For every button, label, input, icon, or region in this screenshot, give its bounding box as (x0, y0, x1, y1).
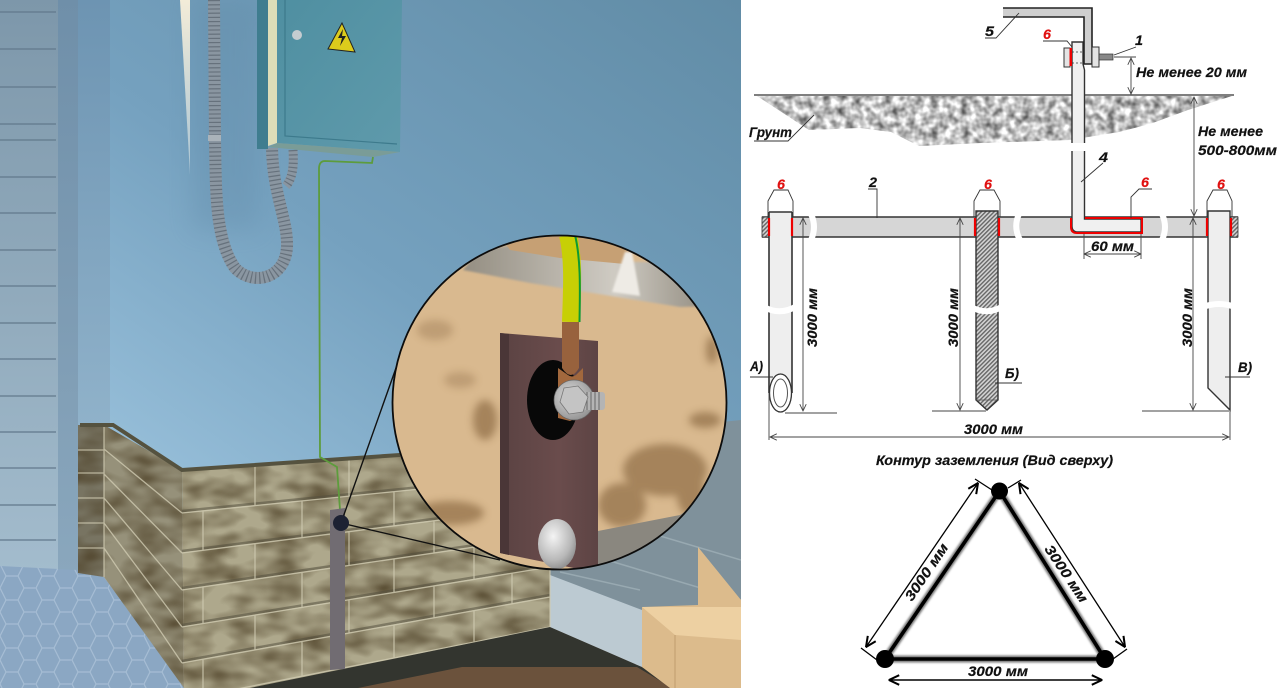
label 1 (1114, 32, 1143, 55)
label 6 at tube V (1207, 176, 1232, 217)
cabinet lock (292, 30, 302, 40)
label 6 top (1043, 26, 1072, 47)
label A (749, 358, 773, 377)
conduit: short (286, 150, 293, 186)
circle outline (392, 236, 726, 570)
dimensions: depth: 500-800мм (1198, 142, 1278, 158)
brown stains (416, 320, 721, 527)
paving (0, 566, 186, 688)
label soil: Грунт (749, 124, 792, 140)
dimension height V: 3000 мм (1179, 287, 1195, 347)
dimension 60 mm: 60 мм (1091, 238, 1135, 254)
label 6 at tube A (768, 176, 793, 217)
label 5 (985, 13, 1019, 39)
dimension left side (861, 479, 992, 660)
mortar highlight (612, 252, 640, 296)
dimension bottom side: 3000 мм (968, 663, 1029, 679)
dimensions: depth: Не менее (1198, 123, 1263, 139)
dimension overall width: 3000 мм (964, 421, 1024, 437)
rusty plate (500, 333, 598, 573)
red welds on electrodes (769, 218, 1231, 236)
conduit: clamp (208, 135, 221, 141)
label A: А) (749, 358, 763, 374)
green ground wire (319, 157, 373, 510)
panel: triangle grounding contour (861, 479, 1127, 680)
red weld on L strip (1071, 218, 1142, 233)
label V (1225, 359, 1252, 377)
heading: top view: Контур заземления (Вид сверху) (876, 452, 1113, 468)
plinth cap (80, 425, 400, 470)
ground line (754, 94, 1234, 96)
beige foreground block (642, 547, 741, 688)
brick plinth (78, 425, 550, 688)
bolt assembly 1 (1064, 47, 1113, 67)
mortar shadows (182, 474, 550, 661)
bottom left electrode (876, 650, 894, 668)
cream light strip (180, 0, 190, 175)
grounding stake (330, 508, 345, 670)
zoom callout lines (341, 368, 500, 560)
label 1: 1 (1135, 32, 1143, 48)
wall background (57, 0, 741, 520)
siding (0, 0, 58, 572)
brick corner inside circle (695, 547, 720, 580)
label B (995, 365, 1022, 383)
label 6 at rod B (974, 176, 1000, 217)
triangle conductor (885, 491, 1105, 659)
lower step area (598, 512, 684, 564)
label B: Б) (1005, 365, 1019, 381)
dimension overall width (769, 393, 1230, 440)
label soil (749, 115, 814, 141)
far face (78, 425, 104, 577)
label 4: 4 (1098, 149, 1108, 165)
panel: white technical drawing background (741, 0, 1280, 688)
top conductor 5 (1003, 8, 1092, 64)
ground shadow (250, 627, 680, 688)
steps at house entrance (550, 420, 741, 688)
panel: 3D house scene with grounding (0, 0, 741, 688)
dimensions: clearance (1114, 57, 1248, 94)
yellow-green wire (568, 235, 580, 322)
rivet (538, 519, 576, 569)
hole (527, 360, 579, 440)
dimension left side: 3000 мм (901, 539, 952, 604)
solid rod electrode B (971, 211, 1003, 410)
column (58, 0, 78, 574)
dimension right side: 3000 мм (1042, 542, 1092, 606)
zoom source dot (333, 515, 349, 531)
icon: high voltage warning (328, 23, 355, 52)
bottom right electrode (1096, 650, 1114, 668)
dimension right side (1008, 480, 1127, 659)
washer (554, 380, 594, 420)
bolt thread (583, 392, 605, 410)
stone base (390, 235, 730, 571)
vertical strip 4 (1066, 42, 1141, 232)
label 6 at tube V: 6 (1217, 176, 1225, 192)
tube electrode A (764, 212, 797, 412)
dimension height A: 3000 мм (804, 287, 820, 347)
label 5: 5 (985, 23, 994, 39)
label 6 at rod B: 6 (984, 176, 992, 192)
hex nut (560, 386, 588, 414)
dimension 60 mm (1084, 234, 1141, 259)
lug (558, 368, 583, 421)
panel: section drawing (749, 8, 1278, 440)
copper sleeve (562, 322, 579, 375)
electrical cabinet (257, 0, 402, 157)
label 6 at tube A: 6 (777, 176, 785, 192)
conduit: long corrugated (214, 0, 287, 278)
magnified circle: connection detail (390, 235, 730, 580)
label 2 (868, 174, 877, 218)
triangle halo (885, 491, 1105, 659)
dimensions: clearance: Не менее 20 мм (1136, 64, 1248, 80)
label 6 at L strip (1131, 174, 1152, 218)
soil (358, 667, 672, 688)
mortar joints (78, 425, 550, 688)
top electrode (991, 482, 1008, 500)
upper stone (506, 236, 631, 264)
soil section (757, 96, 1232, 146)
label 6 at L strip: 6 (1141, 174, 1149, 190)
wall corner (78, 0, 110, 430)
front face (182, 445, 550, 688)
dimensions: depth (1194, 97, 1278, 216)
dimension height B: 3000 мм (945, 287, 961, 347)
stone gap at top (463, 244, 716, 307)
label 4 (1081, 149, 1108, 182)
label 6 top: 6 (1043, 26, 1051, 42)
horizontal strip 2 (762, 214, 1238, 240)
angle electrode V (1203, 211, 1235, 410)
side face (104, 425, 184, 688)
cabinet shadow (210, 163, 236, 212)
label 2: 2 (868, 174, 877, 190)
label V: В) (1238, 359, 1252, 375)
